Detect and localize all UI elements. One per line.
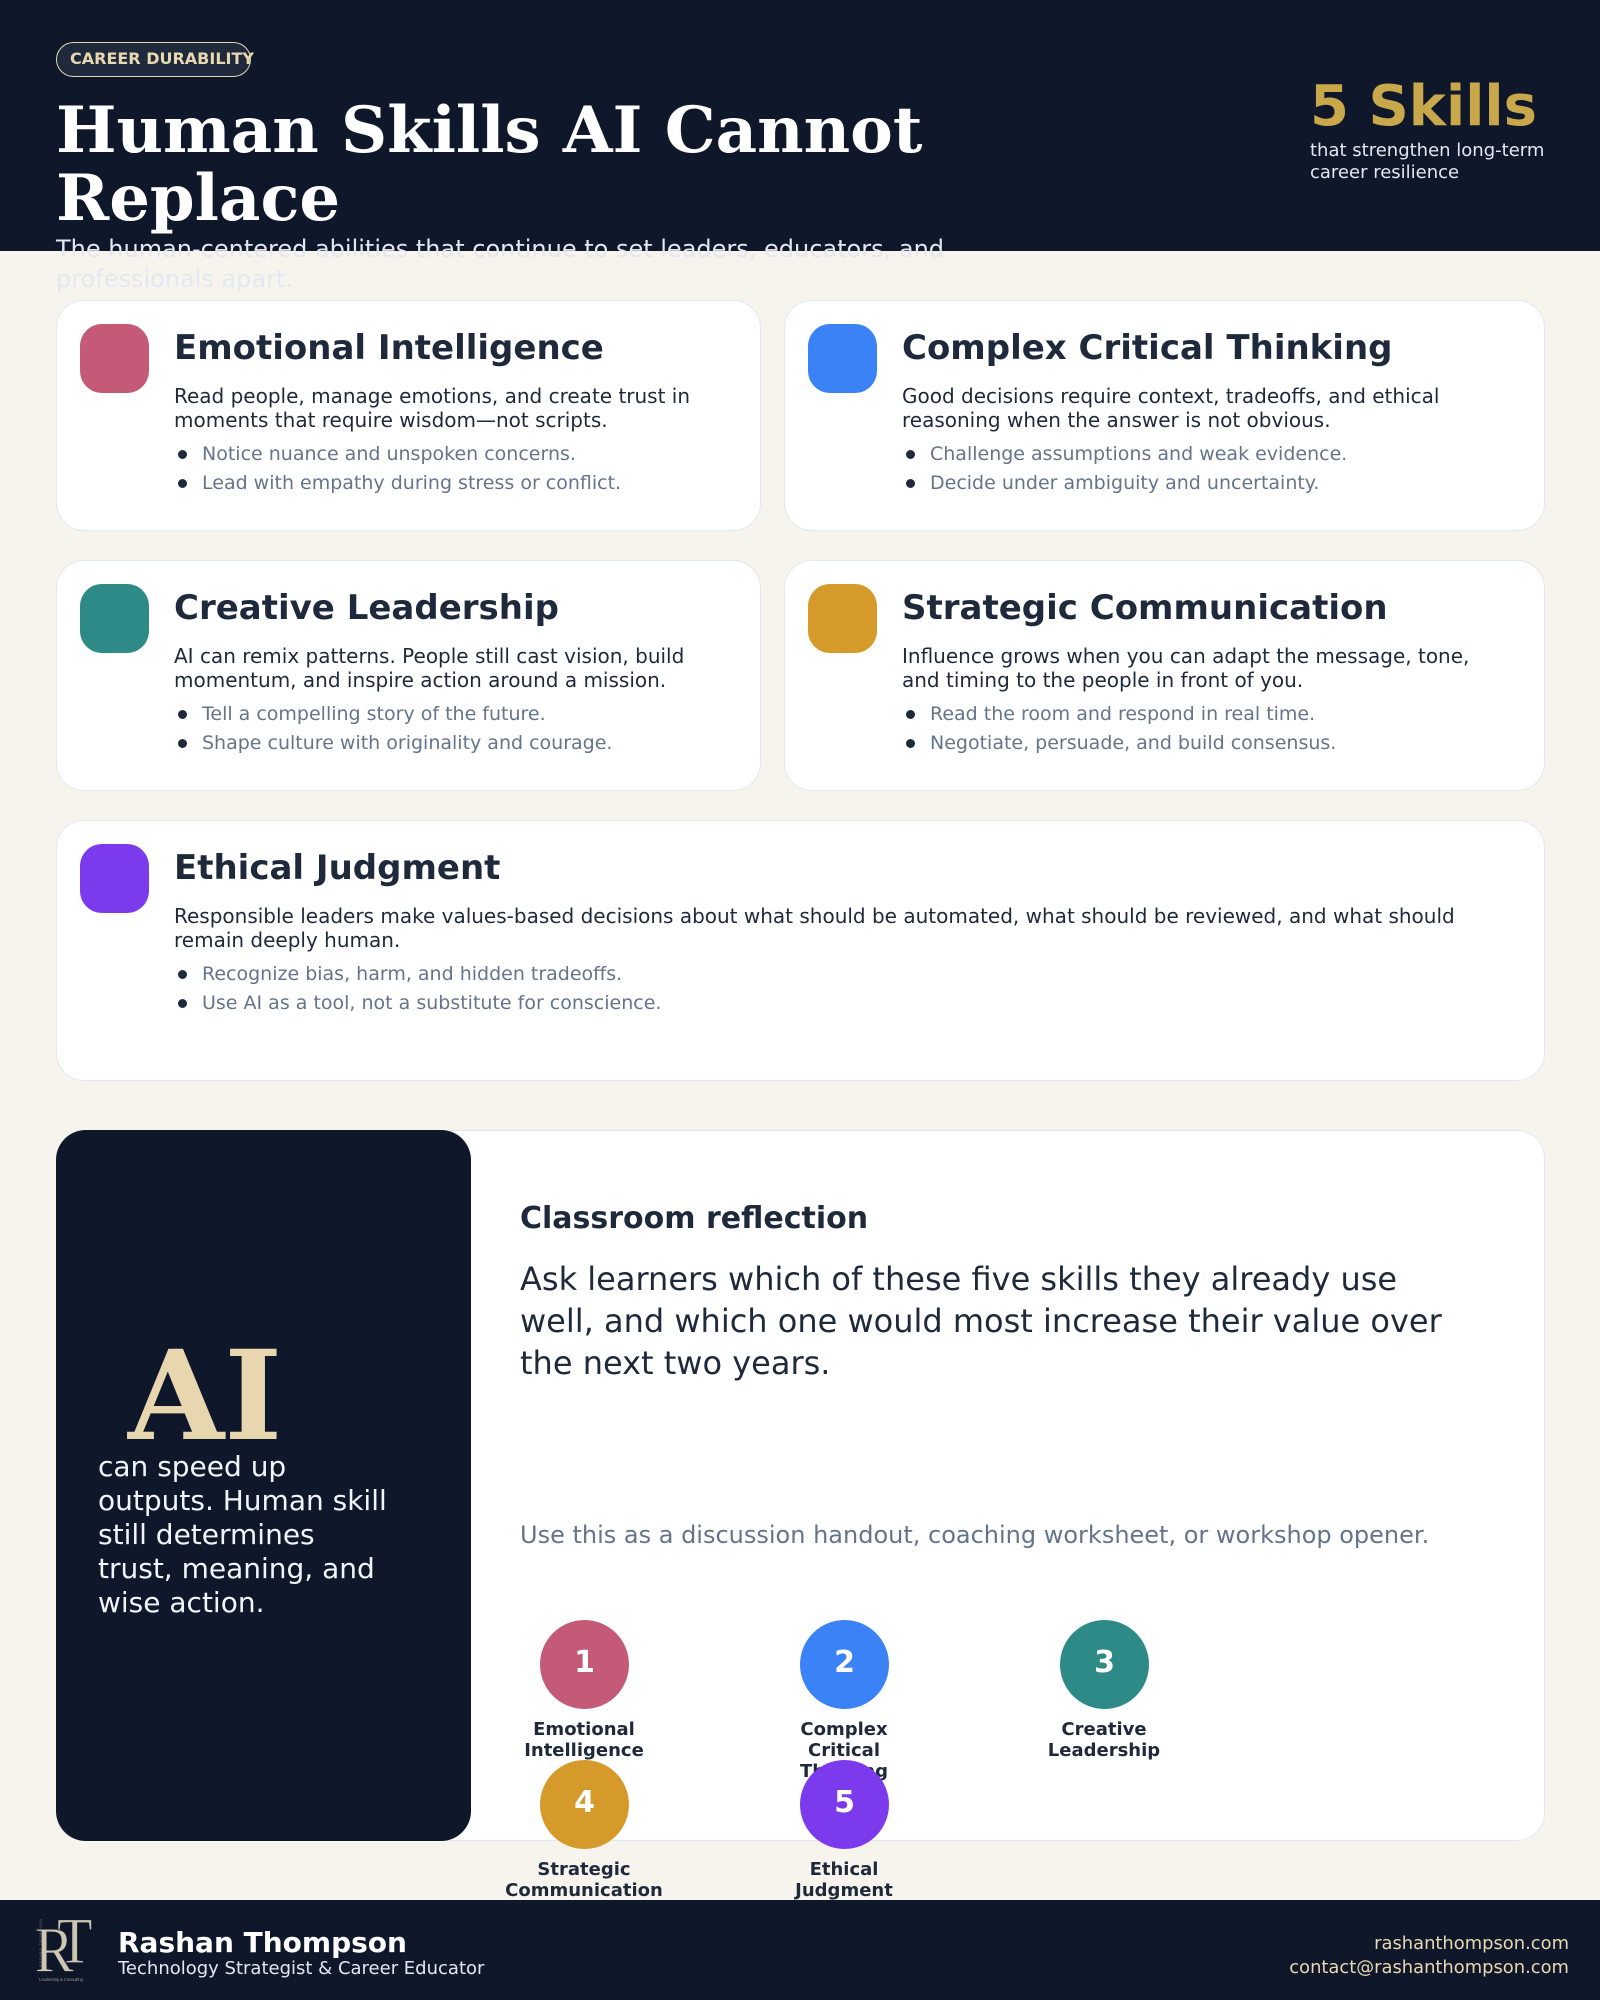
label <box>505 1859 663 1901</box>
footer band <box>0 1900 1600 2000</box>
presenter role: Technology Strategist & Career Educator <box>118 1958 484 1979</box>
description: Responsible leaders make values-based decisions about what should be automated, what should be reviewed, and what should <box>174 904 1455 928</box>
skill marker 5 <box>794 1760 893 1901</box>
ai statement text: can speed up <box>98 1450 286 1483</box>
description: momentum, and inspire action around a mission. <box>174 668 666 692</box>
number circle <box>540 1760 629 1849</box>
logo: RT monogram: Leadership & Consulting <box>39 1977 83 1982</box>
label: Creative <box>1061 1719 1147 1740</box>
description <box>174 904 1455 952</box>
title <box>56 93 922 236</box>
label: Complex <box>800 1719 888 1740</box>
description <box>902 384 1439 432</box>
badge: career durability: CAREER DURABILITY <box>70 49 254 68</box>
reflection prompt: Ask learners which of these five skills they already use <box>520 1260 1397 1298</box>
label: Communication <box>505 1880 663 1901</box>
stat caption: that strengthen long-term <box>1310 140 1544 161</box>
bullet: Use AI as a tool, not a substitute for conscience. <box>202 992 661 1014</box>
bullet: Recognize bias, harm, and hidden tradeoffs. <box>202 963 622 985</box>
label: Intelligence <box>524 1740 644 1761</box>
label: Leadership <box>1048 1740 1160 1761</box>
subtitle <box>56 235 944 293</box>
label: Emotional <box>533 1719 635 1740</box>
heading: Ethical Judgment <box>174 848 500 888</box>
description: remain deeply human. <box>174 928 400 952</box>
panel: ethical judgment <box>56 820 1545 1081</box>
label: Thinking <box>800 1761 888 1782</box>
ai statement text: outputs. Human skill <box>98 1484 387 1517</box>
bullet: Tell a compelling story of the future. <box>202 703 546 725</box>
label: Critical <box>808 1740 880 1761</box>
bullet: Challenge assumptions and weak evidence. <box>930 443 1347 465</box>
reflection heading: Classroom reflection <box>520 1201 868 1236</box>
number circle: 3 <box>1094 1645 1115 1680</box>
number circle <box>800 1760 889 1849</box>
label <box>1048 1719 1160 1761</box>
reflection prompt: the next two years. <box>520 1344 830 1382</box>
skill marker 2 <box>800 1620 889 1782</box>
title: Human Skills AI Cannot <box>56 93 922 168</box>
title: Replace <box>56 161 340 236</box>
number circle: 4 <box>574 1785 595 1820</box>
label: Ethical <box>810 1859 878 1880</box>
number circle <box>800 1620 889 1709</box>
number circle: 1 <box>574 1645 595 1680</box>
icon: violet tile <box>80 844 149 913</box>
stat caption: career resilience <box>1310 162 1459 183</box>
stat number: 5 Skills <box>1310 74 1537 139</box>
skill marker 3 <box>1048 1620 1160 1761</box>
bullet: Read the room and respond in real time. <box>930 703 1315 725</box>
panel: complex critical thinking <box>784 300 1545 531</box>
bullet: Notice nuance and unspoken concerns. <box>202 443 576 465</box>
header band <box>0 0 1600 251</box>
icon: blue tile <box>808 324 877 393</box>
icon: pink tile <box>80 324 149 393</box>
ai statement text <box>98 1450 387 1619</box>
skill marker 4 <box>505 1760 663 1901</box>
logo: RT monogram <box>35 1915 92 1986</box>
label <box>794 1859 893 1901</box>
label <box>524 1719 644 1761</box>
heading: Strategic Communication <box>902 588 1388 628</box>
description: Influence grows when you can adapt the message, tone, <box>902 644 1469 668</box>
bullet: Negotiate, persuade, and build consensus. <box>930 732 1336 754</box>
bullet: Decide under ambiguity and uncertainty. <box>930 472 1319 494</box>
number circle <box>1060 1620 1149 1709</box>
logo: RT monogram: R <box>35 1915 74 1986</box>
description <box>902 644 1469 692</box>
contact details <box>1289 1933 1569 1978</box>
number circle <box>540 1620 629 1709</box>
icon: teal tile <box>80 584 149 653</box>
badge: career durability <box>56 42 251 77</box>
heading: Creative Leadership <box>174 588 559 628</box>
panel: emotional intelligence <box>56 300 761 531</box>
description: Good decisions require context, tradeoffs, and ethical <box>902 384 1439 408</box>
reflection note: Use this as a discussion handout, coaching worksheet, or workshop opener. <box>520 1521 1429 1549</box>
panel: creative leadership <box>56 560 761 791</box>
description: Read people, manage emotions, and create trust in <box>174 384 690 408</box>
icon: amber tile <box>808 584 877 653</box>
bullet: Lead with empathy during stress or conflict. <box>202 472 621 494</box>
ai statement text: wise action. <box>98 1586 264 1619</box>
reflection prompt <box>520 1260 1442 1382</box>
skill marker 1 <box>524 1620 644 1761</box>
description: AI can remix patterns. People still cast vision, build <box>174 644 684 668</box>
description <box>174 644 684 692</box>
description: moments that require wisdom—not scripts. <box>174 408 608 432</box>
reflection prompt: well, and which one would most increase their value over <box>520 1302 1442 1340</box>
logo: RT monogram: RASHAN THOMPSON <box>38 1919 43 1967</box>
heading: Emotional Intelligence <box>174 328 604 368</box>
description: and timing to the people in front of you. <box>902 668 1303 692</box>
label: Strategic <box>537 1859 631 1880</box>
subtitle: The human-centered abilities that continue to set leaders, educators, and <box>56 235 944 263</box>
panel: strategic communication <box>784 560 1545 791</box>
heading: Complex Critical Thinking <box>902 328 1392 368</box>
stat caption <box>1310 140 1544 183</box>
contact details: rashanthompson.com <box>1374 1933 1569 1954</box>
panel: ai statement <box>56 1130 471 1841</box>
description <box>174 384 690 432</box>
presenter name: Rashan Thompson <box>118 1926 407 1959</box>
bullet: Shape culture with originality and courage. <box>202 732 612 754</box>
number circle: 5 <box>834 1785 855 1820</box>
subtitle: professionals apart. <box>56 265 293 293</box>
panel: classroom reflection <box>56 1130 1545 1841</box>
label <box>800 1719 888 1782</box>
ai statement text: still determines <box>98 1518 315 1551</box>
description: reasoning when the answer is not obvious. <box>902 408 1331 432</box>
number circle: 2 <box>834 1645 855 1680</box>
contact details: contact@rashanthompson.com <box>1289 1957 1569 1978</box>
ai statement text: trust, meaning, and <box>98 1552 375 1585</box>
big AI letters: AI <box>128 1324 282 1469</box>
stat: 5 skills <box>1310 74 1544 183</box>
label: Judgment <box>795 1880 893 1901</box>
